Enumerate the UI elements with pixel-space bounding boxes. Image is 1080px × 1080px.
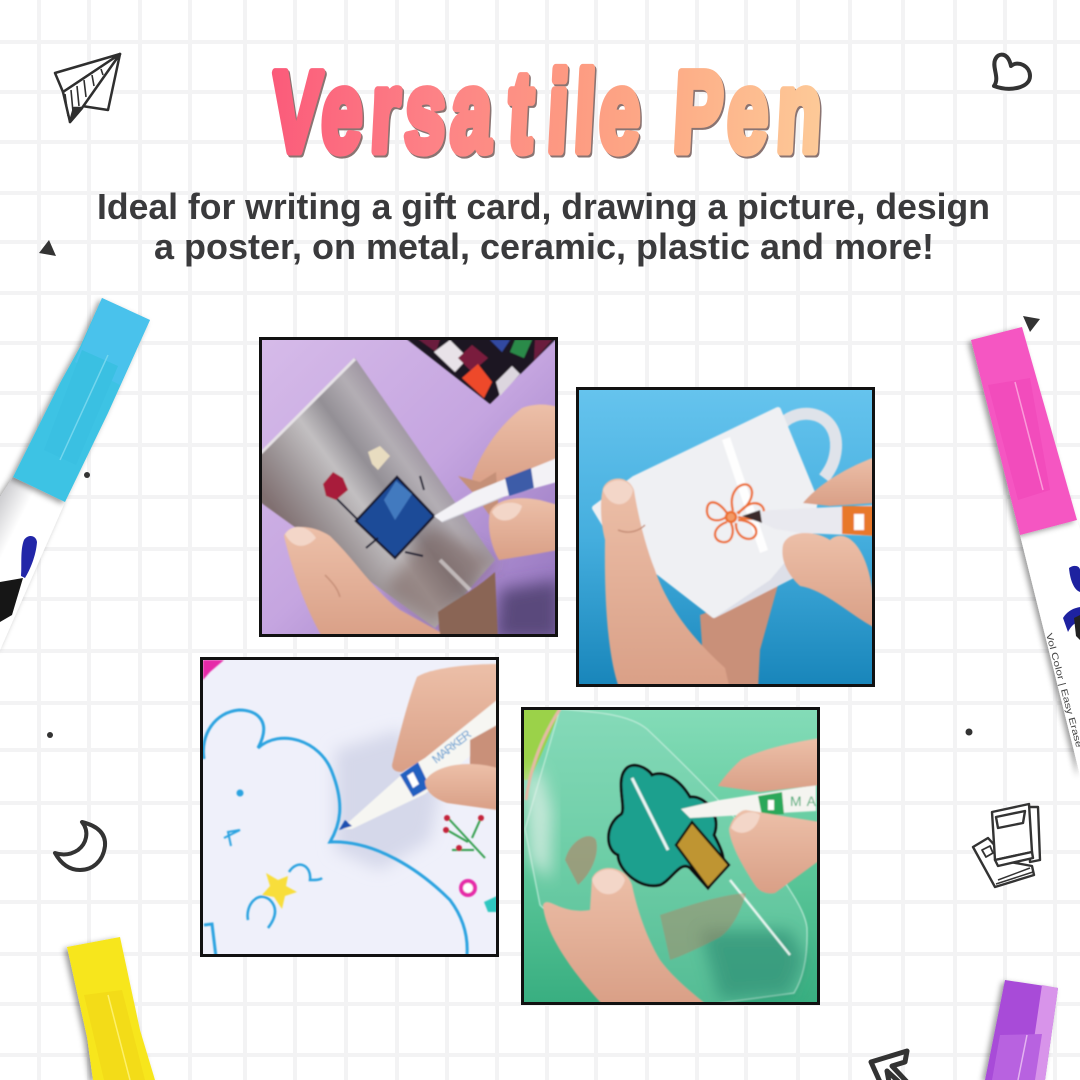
subtitle: a poster, on metal, ceramic, plastic and more!: [154, 226, 934, 267]
lower hand: [543, 868, 707, 1005]
icon: paper plane: [55, 54, 120, 122]
icon: books: [973, 804, 1040, 887]
drawn tree: [608, 765, 724, 888]
photo: glass bottle: [521, 707, 820, 1005]
drawn mascot: [323, 446, 434, 558]
left hand: [601, 478, 730, 690]
pen: purple: [985, 980, 1058, 1080]
rubik's cube: [404, 337, 558, 404]
mug body: [595, 410, 815, 615]
star doodle: [248, 865, 322, 928]
subtitle: [97, 186, 990, 267]
hand lower finger: [425, 764, 497, 810]
icon: crescent moon: [55, 822, 105, 870]
frame: photo 4: [522, 708, 818, 1004]
lower fingers: [489, 498, 558, 560]
bear eye and nose: [224, 790, 244, 846]
red berries: [447, 818, 485, 858]
photo: whiteboard bear: MARKER: [429, 727, 474, 766]
photo: whiteboard bear: [200, 657, 499, 957]
title: Versatile Pen: [270, 51, 826, 178]
right hand: [803, 457, 875, 506]
frame: photo 1: [260, 338, 556, 636]
drawn flower: [707, 484, 764, 542]
subtitle: Ideal for writing a gift card, drawing a picture, design: [97, 186, 990, 227]
title: Versatile Pen: [269, 49, 825, 176]
marker pen: [745, 505, 875, 536]
back of lower hand: [438, 572, 498, 640]
lower back hand: [700, 585, 778, 690]
lower hand: [284, 527, 440, 640]
marker pen: [341, 699, 497, 829]
board shadow: [335, 730, 440, 870]
pen: pink right: [971, 327, 1080, 775]
pen: blue left: [0, 298, 150, 650]
icon: dots: [47, 472, 972, 738]
pink circle doodle: [461, 881, 475, 895]
hand top: [392, 664, 497, 772]
photo: white mug: [576, 387, 875, 690]
photo: steel cup: [259, 337, 560, 640]
mug handle: [782, 414, 836, 478]
fingers behind glass: [565, 836, 597, 885]
photo: glass bottle: MA: [790, 793, 817, 809]
icon: triangle left: [39, 240, 56, 256]
icon: heart: [994, 55, 1030, 89]
steel cup body: [260, 358, 495, 628]
marker pen: [434, 458, 557, 522]
pen: yellow: [67, 937, 155, 1080]
frame: photo 3: [202, 658, 498, 956]
frame: photo 2: [578, 388, 874, 686]
upper hand: [472, 404, 558, 486]
pen: pink right: Vol Color | Easy Erase: [1044, 632, 1080, 748]
icon: arrow doodle: [871, 1051, 907, 1080]
glass bottle: [525, 709, 807, 1005]
icon: triangle right: [1023, 316, 1040, 332]
bear outline: [203, 710, 467, 955]
right hand: [718, 738, 820, 792]
marker pen: [681, 785, 816, 818]
